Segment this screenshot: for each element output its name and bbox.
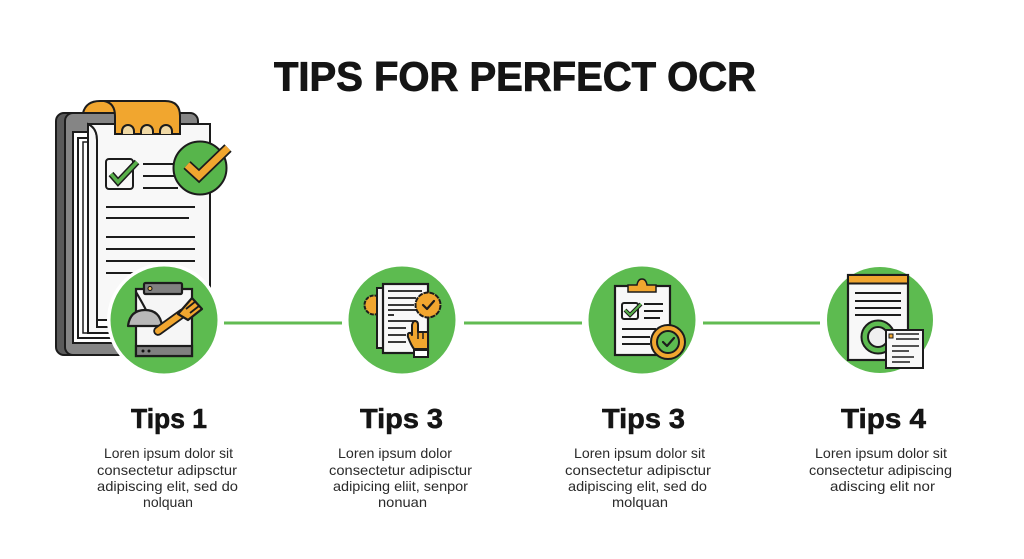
clipboard boards (56, 113, 198, 355)
text block: tip 4 (809, 403, 952, 494)
icon: tip 3 circle (588, 266, 696, 374)
icon: tip 4 circle (827, 267, 933, 373)
text block: tip 4: Loren ipsum dolor sit (815, 445, 947, 461)
text block: tip 2: Tips 3 (360, 403, 443, 434)
text block: tip 1: consectetur adipsctur (97, 462, 237, 478)
title: TIPS FOR PERFECT OCR (274, 54, 756, 100)
text block: tip 3: consectetur adipisctur (565, 462, 711, 478)
front paper (88, 124, 210, 320)
text block: tip 3: Tips 3 (602, 403, 685, 434)
text block: tip 1: adipiscing elit, sed do (97, 478, 238, 494)
text block: tip 1: Loren ipsum dolor sit (104, 445, 233, 461)
connector lines (224, 322, 820, 324)
icon: tip 2 circle (348, 266, 456, 374)
icon: tip 1 circle (107, 263, 221, 377)
text block: tip 1 (97, 403, 238, 510)
text block: tip 3 (565, 403, 711, 510)
text block: tip 3: molquan (612, 494, 668, 510)
stacked pages (73, 124, 173, 343)
paper text lines (106, 164, 195, 273)
text block: tip 2: adipicing eliit, senpor (333, 478, 468, 494)
checkbox with green check (106, 159, 137, 189)
text block: tip 1: Tips 1 (131, 403, 207, 434)
text block: tip 4: adiscing elit nor (830, 478, 935, 494)
text block: tip 2: Loren ipsum dolor (338, 445, 452, 461)
text block: tip 3: adipiscing elit, sed do (568, 478, 707, 494)
green check badge (174, 142, 228, 194)
text block: tip 2: consectetur adipisctur (329, 462, 472, 478)
text block: tip 2: nonuan (378, 494, 427, 510)
orange clip (83, 101, 180, 134)
text block: tip 4: consectetur adipiscing (809, 462, 952, 478)
text block: tip 4: Tips 4 (841, 403, 926, 434)
text block: tip 1: nolquan (143, 494, 193, 510)
text block: tip 2 (329, 403, 472, 510)
text block: tip 3: Loren ipsum dolor sit (574, 445, 705, 461)
icon: main clipboard illustration (56, 101, 228, 355)
